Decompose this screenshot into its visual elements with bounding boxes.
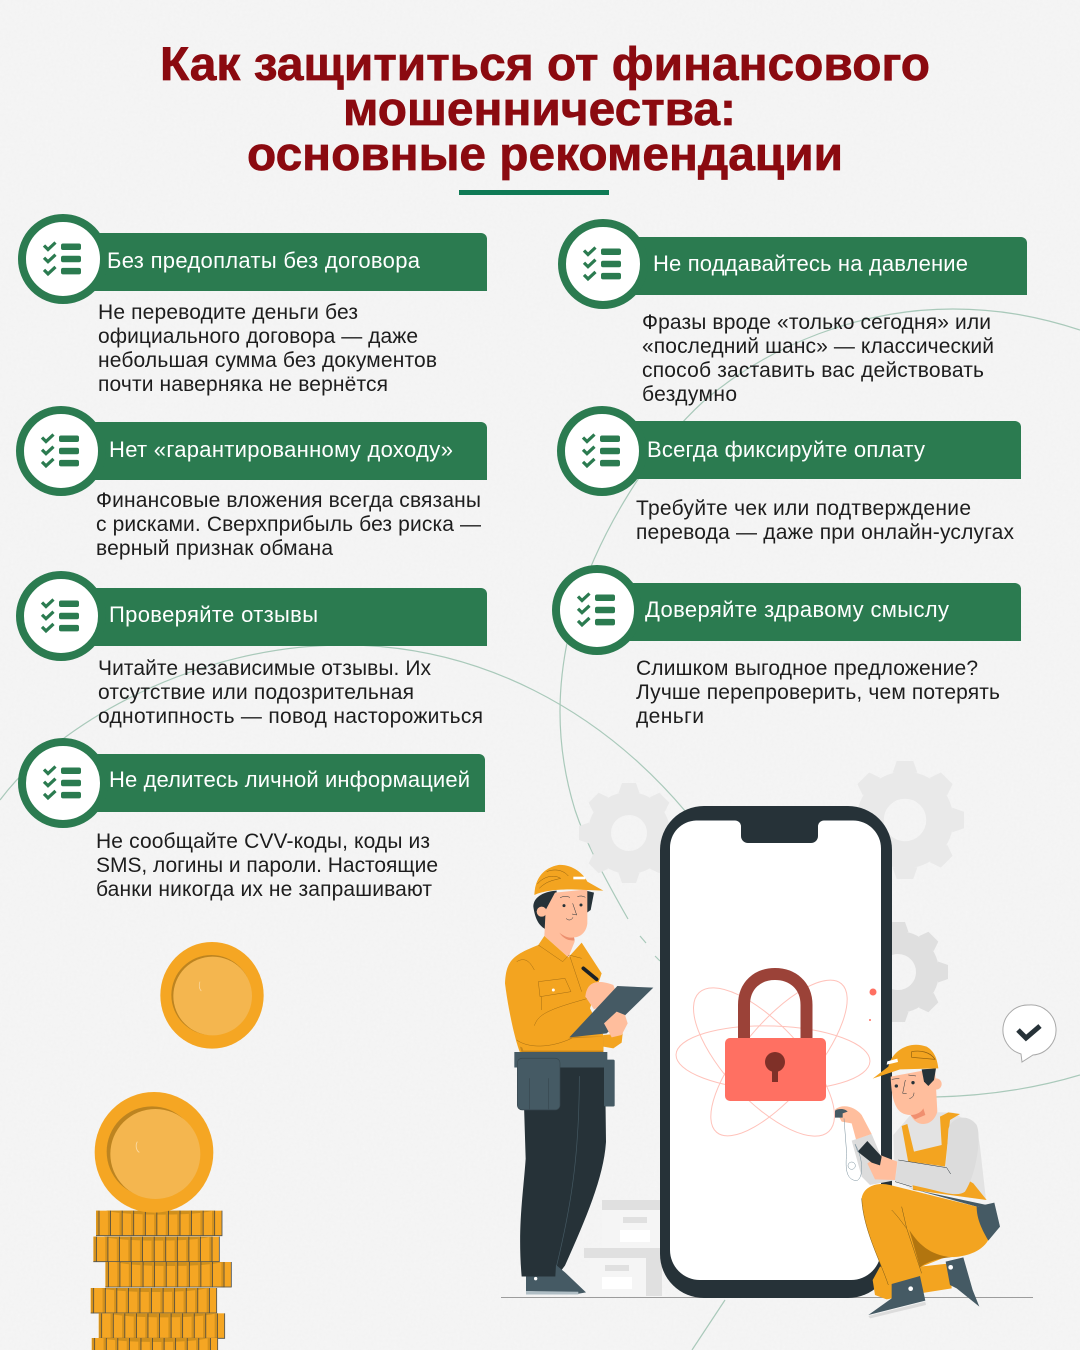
orbits [671, 961, 871, 1157]
body text: Не переводите деньги без [98, 301, 358, 324]
phone [660, 806, 892, 1298]
icon: coins [91, 942, 264, 1350]
keyhole [765, 1052, 785, 1082]
panel: гарантированный доход [20, 410, 487, 560]
body text: Читайте независимые отзывы. Их [98, 657, 432, 680]
icon: checklist [20, 410, 102, 492]
belt and pouches [514, 1052, 615, 1110]
clipboard [569, 986, 653, 1037]
figure: worker with clipboard [505, 865, 653, 1294]
panel: отзывы [20, 575, 487, 728]
torso [893, 1112, 986, 1200]
body text [96, 830, 438, 901]
cable [844, 1118, 862, 1181]
lock body [725, 1038, 826, 1101]
body text: деньги [636, 705, 704, 728]
icon: checklist [556, 569, 638, 651]
heading banner [90, 754, 485, 812]
forearm and hands [852, 1134, 897, 1185]
shirt [505, 936, 603, 1053]
body text: почти наверняка не вернётся [98, 373, 388, 396]
heading banner [90, 588, 487, 646]
body text [636, 497, 1014, 544]
title: мошенничества: [343, 82, 736, 135]
body text: перевода — даже при онлайн-услугах [636, 521, 1014, 544]
shackle [744, 974, 806, 1042]
body text: способ заставить вас действовать [642, 359, 984, 382]
heading banner [90, 422, 487, 480]
overalls bib [902, 1112, 987, 1200]
icon: checklist [20, 575, 102, 657]
body text: Финансовые вложения всегда связаны [96, 489, 481, 512]
body text: банки никогда их не запрашивают [96, 878, 432, 901]
body text: официального договора — даже [98, 325, 418, 348]
panel: без предоплаты [22, 218, 487, 396]
panel: фиксируйте оплату [561, 410, 1021, 544]
body text: с рисками. Сверхприбыль без риска — [96, 513, 481, 536]
panel: давление [562, 223, 1027, 406]
heading text: Нет «гарантированному доходу» [109, 437, 453, 462]
body text [98, 301, 437, 396]
heading text: Доверяйте здравому смыслу [645, 597, 949, 622]
background gears [579, 761, 964, 1022]
panel: личная информация [22, 742, 485, 901]
icon: checklist [561, 410, 643, 492]
heading text: Всегда фиксируйте оплату [647, 437, 925, 462]
icon: check speech bubble [1003, 1005, 1056, 1062]
body text [98, 657, 483, 728]
front boot [868, 1276, 925, 1315]
title: Как защититься от финансового [160, 37, 930, 90]
heading banner [625, 583, 1021, 641]
body text: небольшая сумма без документов [98, 349, 437, 372]
icon: checklist [22, 218, 104, 300]
body text [636, 657, 1000, 728]
heading text: Не делитесь личной информацией [109, 767, 470, 792]
background boxes [584, 1200, 662, 1296]
arm [895, 1118, 979, 1194]
body text: Требуйте чек или подтверждение [636, 497, 971, 520]
icon: checklist [22, 742, 104, 824]
heading text: Проверяйте отзывы [109, 602, 318, 627]
device [858, 1141, 882, 1165]
heading text: Без предоплаты без договора [107, 248, 421, 273]
title [160, 37, 930, 180]
title underline [459, 190, 609, 195]
ground line [501, 1297, 1033, 1298]
hard hat [534, 865, 603, 895]
body text: Слишком выгодное предложение? [636, 657, 978, 680]
pouch [977, 1203, 1000, 1241]
coin stack [91, 1211, 231, 1350]
lock [671, 961, 876, 1157]
body text: SMS, логины и пароли. Настоящие [96, 854, 438, 877]
icon: checklist [562, 223, 644, 305]
panel: здравый смысл [556, 569, 1021, 728]
upper body [505, 865, 653, 1053]
heading banner [630, 421, 1021, 479]
body text: отсутствие или подозрительная [98, 681, 414, 704]
heading banner [630, 237, 1027, 295]
hard hat [873, 1045, 938, 1079]
thigh and front leg [862, 1184, 988, 1285]
back leg and boot [873, 1263, 952, 1299]
heading banner [90, 233, 487, 291]
body text: верный признак обмана [96, 537, 333, 560]
body text: Фразы вроде «только сегодня» или [642, 311, 991, 334]
figure: crouching worker [835, 1045, 1000, 1318]
body text [96, 489, 481, 560]
body text: однотипность — повод насторожиться [98, 705, 483, 728]
body text: Не сообщайте CVV-коды, коды из [96, 830, 430, 853]
body text: «последний шанс» — классический [642, 335, 994, 358]
neck and head [891, 1068, 937, 1124]
title: основные рекомендации [247, 127, 843, 180]
hand and pen [585, 982, 615, 1009]
lower body [520, 1062, 606, 1294]
body text: Лучше перепроверить, чем потерять [636, 681, 1000, 704]
heading text: Не поддавайтесь на давление [653, 251, 968, 276]
body text: бездумно [642, 383, 737, 406]
coin: lower [95, 1092, 213, 1213]
coin: upper [160, 942, 264, 1049]
body text [642, 311, 994, 406]
